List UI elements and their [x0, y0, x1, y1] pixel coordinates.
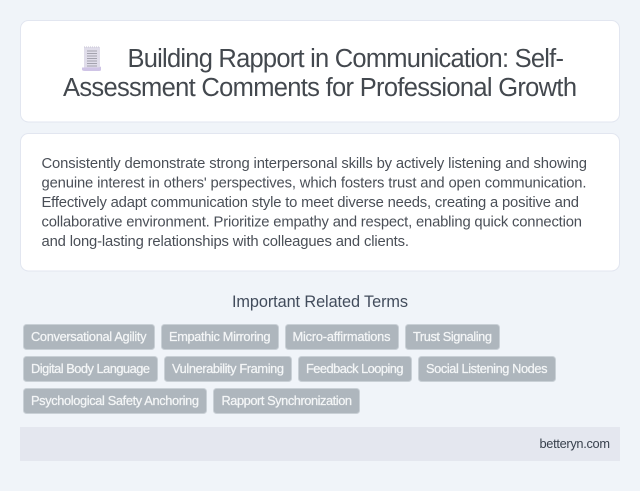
- panel: title header: [20, 20, 620, 122]
- summary line 5: and long-lasting relationships with colleagues and clients.: [42, 234, 409, 250]
- tag: Conversational Agility: [24, 324, 154, 350]
- tag: Feedback Looping: Feedback Looping: [306, 361, 404, 376]
- tag: Psychological Safety Anchoring: [24, 388, 206, 414]
- tag: Digital Body Language: Digital Body Language: [31, 361, 150, 376]
- summary line 3: Effectively adapt communication style to meet diverse needs, creating a positive and: [42, 195, 579, 211]
- tag: Trust Signaling: [406, 324, 500, 350]
- tag: Vulnerability Framing: [164, 356, 292, 382]
- summary line 1: Consistently demonstrate strong interpersonal skills by actively listening and showing: [42, 156, 587, 172]
- tag: Trust Signaling: Trust Signaling: [413, 329, 492, 344]
- tag: Empathic Mirroring: Empathic Mirroring: [169, 329, 270, 344]
- summary line 4: collaborative environment. Prioritize empathy and respect, enabling quick connection: [42, 214, 582, 230]
- tag: Social Listening Nodes: Social Listening Nodes: [426, 361, 548, 376]
- title line 2: Assessment Comments for Professional Growth: [63, 74, 577, 102]
- tag: Rapport Synchronization: [214, 388, 360, 414]
- tag: Rapport Synchronization: Rapport Synchronization: [222, 393, 352, 408]
- footer bar: [20, 427, 620, 461]
- heading: related terms: Important Related Terms: [232, 293, 408, 311]
- footer source text: betteryn.com: [540, 436, 610, 451]
- title line 1: Building Rapport in Communication: Self-: [128, 45, 564, 73]
- tag: Feedback Looping: [298, 356, 412, 382]
- icon: paper scroll: [82, 47, 101, 71]
- tag: Psychological Safety Anchoring: Psychological Safety Anchoring: [31, 393, 199, 408]
- summary line 2: genuine interest in others' perspectives, which fosters trust and open communication.: [42, 176, 586, 192]
- tag: Empathic Mirroring: [162, 324, 278, 350]
- tag: Micro-affirmations: [286, 324, 398, 350]
- tag: Digital Body Language: [24, 356, 158, 382]
- tag: Social Listening Nodes: [418, 356, 556, 382]
- tag: Vulnerability Framing: Vulnerability Framing: [172, 361, 284, 376]
- tag: Conversational Agility: Conversational Agility: [31, 329, 147, 344]
- panel: summary text: [20, 134, 620, 271]
- tag: Micro-affirmations: Micro-affirmations: [292, 329, 390, 344]
